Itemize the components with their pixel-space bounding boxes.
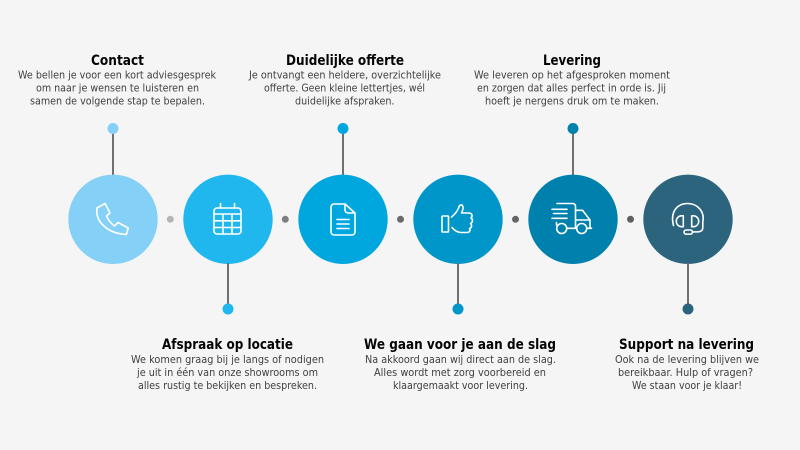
heading: Duidelijke offerte: Duidelijke offerte [286,53,404,69]
heading: Contact: Contact [91,53,144,69]
text block: Support na levering description: bereikbaar. Hulp of vragen? [618,367,753,379]
connector with pin: We gaan voor je aan de slag [452,263,464,314]
connector with pin: Afspraak op locatie [222,263,234,314]
step 4: We gaan voor je aan de slag [364,175,556,392]
step circle: We gaan voor je aan de slag [413,175,503,264]
connector with pin: Duidelijke offerte [338,123,348,176]
text block: Support na levering description [615,354,759,392]
text block: Levering description: We leveren op het afgesproken moment [474,69,670,81]
step circle: Afspraak op locatie [183,175,273,264]
heading: Afspraak op locatie: Afspraak op locatie [162,337,293,353]
text block: Contact description [18,69,216,107]
text block: Duidelijke offerte description: Je ontvangt een heldere, overzichtelijke [248,69,441,81]
heading: We gaan voor je aan de slag: We gaan voor je aan de slag [364,337,556,353]
text block: Duidelijke offerte description: offerte. Geen kleine lettertjes, wél [264,82,425,94]
text block: Afspraak op locatie description: je uit in één van onze showrooms om [136,367,318,379]
icon: calendar [214,204,241,234]
step 6: Support na levering [615,175,759,392]
step 3: Duidelijke offerte [248,53,441,264]
text block: Afspraak op locatie description [131,354,324,392]
text block: Levering description: en zorgen dat alles perfect in orde is. Jij [477,82,666,94]
step 1: Contact [18,53,216,264]
text block: Levering description [474,69,670,107]
text block: Contact description: We bellen je voor een kort adviesgesprek [18,69,216,81]
step circle: Support na levering [643,175,733,264]
icon: delivery truck [552,204,592,234]
text block: Levering description: hoeft je nergens druk om te maken. [485,95,659,107]
text block: Duidelijke offerte description: duidelijke afspraken. [295,95,394,107]
connector with pin: Levering [568,123,578,176]
icon: document [331,204,355,235]
text block: We gaan voor je aan de slag description [365,354,556,392]
text block: We gaan voor je aan de slag description: klaargemaakt voor levering. [393,380,528,392]
heading: Support na levering: Support na levering [619,337,754,353]
step circle: Duidelijke offerte [298,175,388,264]
separator dot 3 [397,216,404,223]
connector with pin: Contact [108,123,118,176]
separator dot 1 [167,216,174,223]
heading: Levering: Levering [543,53,601,69]
text block: Contact description: samen de volgende stap te bepalen. [30,95,205,107]
text block: Afspraak op locatie description: alles rustig te bekijken en bespreken. [138,380,317,392]
icon: thumbs up [442,205,472,232]
text block: Contact description: om naar je wensen te luisteren en [36,82,199,94]
step circle: Levering [528,175,618,264]
text block: Duidelijke offerte description [248,69,441,107]
separator dot 2 [282,216,289,223]
text block: Support na levering description: We staan voor je klaar! [632,380,742,392]
text block: We gaan voor je aan de slag description: Na akkoord gaan wij direct aan de slag. [365,354,556,366]
icon: headset [673,204,703,234]
separator dot 4 [512,216,519,223]
separator dot 5 [627,216,634,223]
icon: phone [97,204,128,234]
text block: Support na levering description: Ook na de levering blijven we [615,354,759,366]
step 5: Levering [474,53,670,264]
text block: Afspraak op locatie description: We komen graag bij je langs of nodigen [131,354,324,366]
step circle: Contact [68,175,158,264]
connector with pin: Support na levering [682,263,694,314]
text block: We gaan voor je aan de slag description: Alles wordt met zorg voorbereid en [374,367,546,379]
step 2: Afspraak op locatie [131,175,324,392]
